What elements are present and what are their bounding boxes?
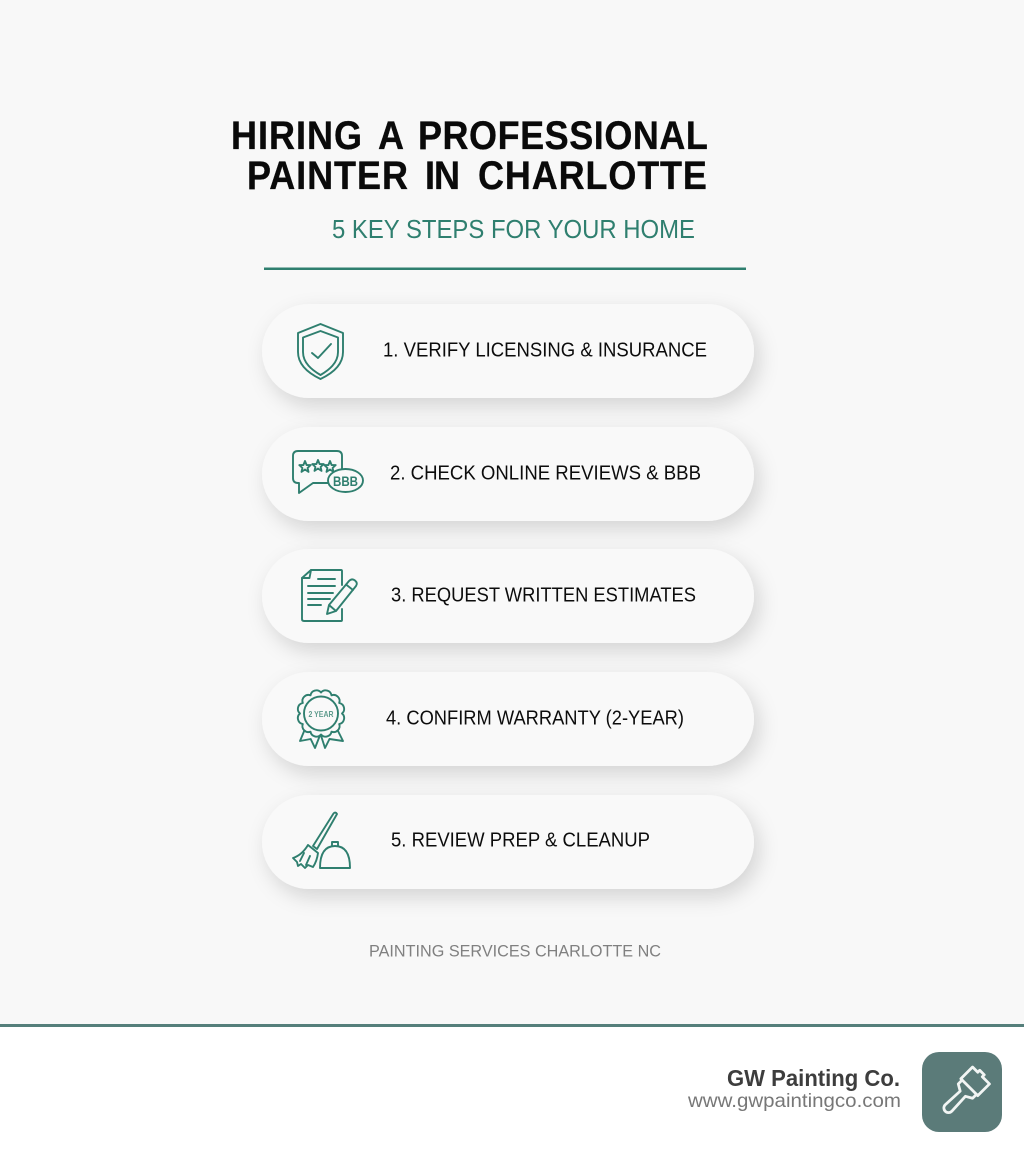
icon: document and pencil (302, 570, 357, 621)
company website: www.gwpaintingco.com (687, 1090, 901, 1112)
title: A (378, 114, 404, 158)
title: PAINTER (247, 154, 408, 198)
title (231, 114, 708, 198)
step 1 label: 1. VERIFY LICENSING & INSURANCE (383, 338, 707, 362)
heading rule (264, 268, 746, 270)
icon: warranty rosette: 2 YEAR (308, 709, 334, 719)
panel: step 1 (262, 304, 754, 398)
step 4 label: 4. CONFIRM WARRANTY (2-YEAR) (386, 706, 684, 730)
step 5 label: 5. REVIEW PREP & CLEANUP (391, 828, 650, 852)
step 3 label: 3. REQUEST WRITTEN ESTIMATES (391, 584, 696, 606)
icon: warranty rosette (298, 690, 344, 748)
panel: step 3 (262, 549, 754, 643)
title: IN (425, 154, 460, 198)
panel: step 5 (262, 795, 754, 889)
panel: step 2 (262, 427, 754, 521)
step 2 label: 2. CHECK ONLINE REVIEWS & BBB (390, 462, 701, 484)
icon: broom and dustpan (293, 813, 350, 868)
title: CHARLOTTE (478, 154, 707, 198)
title: PROFESSIONAL (418, 114, 708, 158)
panel: step 4 (262, 672, 754, 766)
company name: GW Painting Co. (727, 1065, 900, 1091)
caption: PAINTING SERVICES CHARLOTTE NC (369, 942, 661, 960)
icon: review bubble with stars and BBB (293, 451, 363, 493)
icon: shield with check (298, 324, 343, 379)
icon: paintbrush logo (922, 1052, 1002, 1132)
subtitle: 5 KEY STEPS FOR YOUR HOME (332, 216, 695, 244)
panel: footer (0, 1024, 1024, 1154)
title: HIRING (231, 114, 362, 158)
icon: review bubble with stars and BBB: BBB (333, 473, 358, 489)
